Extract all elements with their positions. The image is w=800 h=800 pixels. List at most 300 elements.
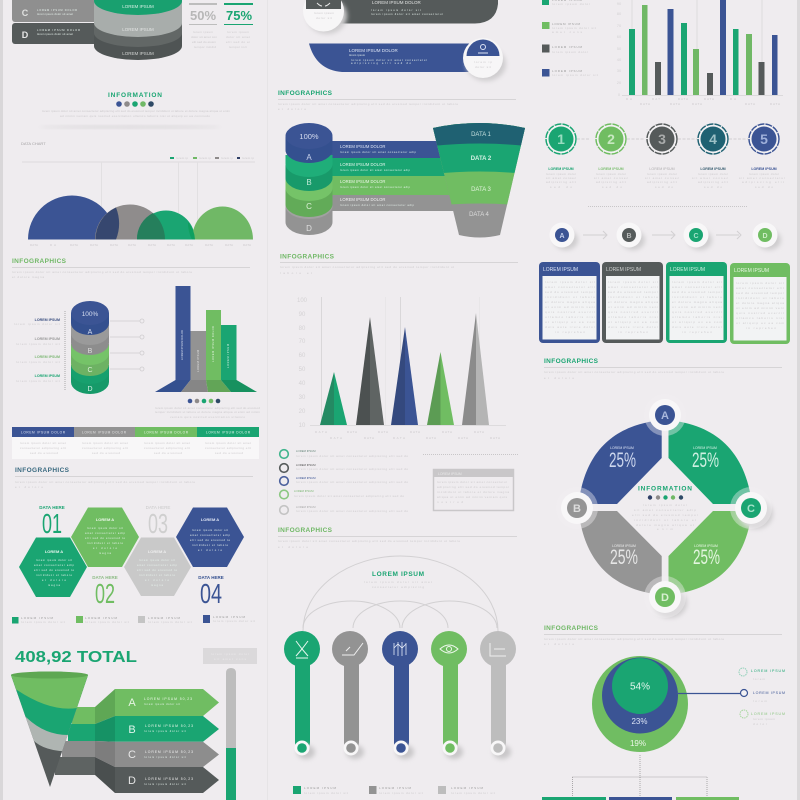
hexagon cluster: elit sed do eiusmod te [34,568,75,572]
arrow labels: lorem ipsum dolor sit [144,782,186,786]
pin 3 [382,631,418,759]
step 1: LOREM IPSUM [548,167,574,171]
card green: amet consectetur elit [672,285,722,289]
dots and caption [155,399,260,419]
x axis labels: DATA [458,436,468,440]
axis labels: DATA [30,243,38,247]
card dark: ullamco laboris nisi [608,315,658,319]
x axis labels: DATA [745,102,755,106]
description [280,265,454,275]
table: LOREM IPSUM DOLOR [21,430,66,434]
card blue: ullamco laboris nisi [545,315,595,319]
badge B: B [626,233,632,240]
hexagon legend: LOREM IPSUM [213,615,246,619]
hexagon cluster: LOREM A [45,549,63,554]
hexagon cluster: elit sed do eiusmod te [137,568,178,572]
description: lorem ipsum dolor sit amet consectetur adipiscing elit sed do eiusmod tempor incididunt ut labore [278,539,460,543]
x axis labels: DA [626,97,632,101]
hexagon cluster: incididunt ut labore [36,573,73,577]
ring legend: LOREM IPSUM [294,489,314,493]
card dark: amet consectetur elit [608,285,658,289]
step 1: adipiscing elit [546,180,576,184]
card blue: amet consectetur elit [545,285,595,289]
badge B [616,222,645,250]
panel: triangle chart [280,254,518,514]
x axis labels: DATA [315,430,327,434]
layered cylinder [94,0,182,60]
axis labels: DATA [128,243,136,247]
x axis labels: DATA [364,436,374,440]
x axis labels: DATA [442,430,452,434]
x axis labels: DATA [692,102,702,106]
pin legend: LOREM IPSUM [379,786,412,790]
cylinder stack: D [87,386,93,393]
funnel labels: DATA 4 [469,212,490,218]
nested circles: 54% [630,682,650,692]
step 2: LOREM IPSUM [598,167,624,171]
y axis labels: 80 [299,326,306,332]
data label 02 [92,575,118,609]
right labels: lorem [753,699,768,703]
card dark: quis nostrud exercit [608,310,658,314]
description: ad minim veniam quis nostrud exercitation ullamco laboris nisi ut aliquip ex ea commodo [60,114,210,118]
right labels: LOREM IPSUM [751,669,785,673]
funnel [11,672,88,787]
step 1 [546,124,576,189]
x axis labels: DATA [426,436,436,440]
step 3: lorem ipsum dolor [647,172,677,176]
bar chart with base: LOREM IPSUM [196,350,200,372]
hexagon legend: LOREM IPSUM [148,616,180,620]
hexagon cluster: LOREM A [201,517,219,522]
card light green: et dolore magna aliqua [736,301,784,305]
stat 75%: tempor inci [229,45,247,49]
left labels: LOREM IPSUM [35,337,60,341]
cylinder stack: 100% [299,132,319,141]
hexagon cluster: lorem ipsum dolor sit [139,558,175,562]
funnel labels: DATA 2 [471,156,492,162]
quadrant green: 25% [692,449,719,472]
quadrant green: LOREM IPSUM [693,446,717,450]
panel: infographics left 1 [12,258,260,459]
title: consectetur adipiscing [372,585,424,589]
hexagon cluster: amet consectetur adip [85,531,126,535]
stat 75%: elit sed do ei [226,40,250,44]
hexagon legend: LOREM IPSUM [85,616,118,620]
bar chart with base: LOREM IPSUM [226,344,230,368]
step 2: 2 [607,131,615,147]
arrow labels: B [128,724,136,736]
table: LOREM IPSUM DOLOR [144,430,189,434]
description [544,370,724,380]
centre information: elit sed do eiusmod tempor [632,513,698,517]
pin legend [293,786,495,795]
blue banner: adipiscing elit sed do [351,61,412,65]
arrow 1 [583,231,607,239]
x axis labels: DAT [652,97,660,101]
left labels: lorem ipsum dolor sit [14,322,60,326]
stat 50% [189,3,217,49]
arrow labels: lorem ipsum dolor sit [144,755,186,759]
stat 50%: lorem ipsum [193,30,214,34]
pin 2 [332,631,368,759]
x axis labels: DATA [670,102,680,106]
y axis labels: 50 [299,367,306,373]
card blue: LOREM IPSUM [543,267,578,273]
leader lines [110,319,144,371]
centre information: incididunt ut labore et [634,518,696,522]
card dark: ut aliquip ex ea com [608,320,658,324]
left labels: lorem ipsum dolor sit [16,379,60,383]
note box: aliqua ut enim ad minim veniam quis [437,495,508,499]
arrow labels [115,689,219,793]
card dark: duis aute irure dolor [608,325,658,329]
panel: cylinder to funnel [278,90,535,245]
grey label box [203,648,257,664]
step 5: LOREM IPSUM [751,167,777,171]
x axis labels: DATA [410,430,420,434]
note box: LOREM IPSUM [438,472,462,476]
step 2: adipiscing elit [596,180,626,184]
badge D [752,222,781,250]
table [12,427,259,459]
data label 04 [198,575,224,609]
card blue: in reprehen [555,330,585,334]
grey label box: sit amet cons [214,657,246,661]
blue badge: dolor sit [475,65,491,69]
data label 03: DATA HERE [146,505,170,510]
card green: ut aliquip ex ea com [672,320,722,324]
arrow labels: LOREM IPSUM 50,23 [145,724,193,728]
step 5: 5 [760,131,768,147]
panel: hexagons [12,467,255,624]
tab D: LOREM IPSUM DOLOR [37,28,80,32]
step 5 [739,124,785,189]
chart legend: lorem ip [199,156,211,160]
data label 01: 01 [42,508,62,539]
card green: LOREM IPSUM [670,267,705,273]
ring legend: lorem ipsum dolor sit amet consectetur adipiscing elit sed do [294,494,404,498]
title [364,571,432,589]
description: et dolore magna [12,275,44,279]
card light green: amet consectetur elit [736,286,784,290]
left labels: LOREM IPSUM [35,374,60,378]
x axis labels [315,430,500,440]
card light green: ullamco laboris nisi [736,316,784,320]
badge D [644,576,687,618]
blue banner: lorem ipsum [349,53,365,57]
ribbons: lorem ipsum dolor sit amet consectetur adip [340,185,411,189]
right labels: LOREM IPSUM [751,712,785,716]
description: lorem ipsum dolor sit amet consectetur adipiscing elit sed do eiusmod tempor incididunt ut labore [12,270,192,274]
bar legend: lorem ipsum dolor [552,50,588,54]
card green: ut enim ad minim veni [672,305,722,309]
x axis labels: DATA [330,436,342,440]
arrow labels: LOREM IPSUM 50,23 [145,777,193,781]
triangles [320,313,489,425]
bar legend: amet cons [552,30,582,34]
stat 75%: dolor sit amet [226,35,250,39]
dark banner [335,0,498,24]
badge A: A [661,410,669,422]
hexagon legend [12,615,255,624]
centre information: enim [657,527,674,531]
table: consectetur adipiscing elit [144,446,190,450]
heading: INFOGRAPHICS [544,625,599,632]
blue banner [309,44,470,72]
card green: lorem ipsum dolor sit [672,280,722,284]
heading: INFOGRAPHICS [280,254,335,260]
dark badge: lorem ipsum [314,11,334,15]
description: lorem ipsum dolor sit amet consectetur adipiscing elit sed do eiusmod tempor incididunt ut labore [15,480,195,484]
axis labels: DATA [185,243,193,247]
blue banner: lorem ipsum dolor sit amet consectetur [351,58,427,62]
axis labels: DATA [110,243,118,247]
funnel labels: DATA 1 [471,132,492,138]
step 1: 1 [557,131,565,147]
badge A [644,394,686,436]
card green: duis aute irure dolor [672,325,722,329]
y axis labels: 0 [618,92,621,97]
ring legend [280,449,408,514]
card blue: ut aliquip ex ea com [545,320,596,324]
x axis labels: DATA [770,102,780,106]
bar legend: LOREM IPSUM [552,22,580,26]
hexagon legend: lorem ipsum dolor sit [85,620,129,624]
tab C: C [22,8,29,18]
card light green: sed do eiusmod tempor [736,291,784,295]
axis labels: DATA [167,243,175,247]
description: et dolore [544,376,574,380]
step 4: lorem ipsum dolor [698,172,728,176]
x axis labels: DA [730,97,736,101]
dark banner: lorem ipsum dolor sit amet consectetur [371,12,443,16]
panel: bar chart top right [542,0,783,106]
y axis labels: 40 [617,57,622,62]
pin 5 [480,631,516,759]
ring legend: lorem ipsum dolor sit amet consectetur adipiscing elit sed do [296,467,408,471]
funnel labels [469,132,492,218]
hexagon cluster: lorem ipsum dolor sit [192,528,228,532]
card green: ullamco laboris nisi [672,315,722,319]
heading: INFOGRAPHICS [544,358,599,365]
hexagon cluster: amet consectetur adip [137,563,178,567]
quadrant grey [578,511,662,595]
ring legend: LOREM IPSUM [296,449,316,453]
hexagon cluster: amet consectetur adip [190,533,231,537]
panel: funnel total [5,648,257,800]
card blue: quis nostrud exercit [545,310,595,314]
description [42,109,230,118]
step 3: sed do [655,185,673,189]
axis labels: DATA [243,243,251,247]
card dark: sed do eiusmod tempor [608,290,658,294]
grey label box: lorem ipsum dolor [211,652,249,656]
hexagon cluster: et dolore [42,578,67,582]
cylinder stack [286,123,332,235]
step 3: sit amet consec [645,176,680,180]
vertical progress bar [226,668,236,800]
cylinder stack: C [87,367,93,374]
arrow 2 [652,231,675,239]
stat 75%: 75% [226,8,252,23]
connecting arcs [303,556,498,631]
card blue: duis aute irure dolor [545,325,595,329]
ring legend: lorem ipsum dolor sit amet consectetur adipiscing elit sed do [296,509,408,513]
arrow labels: lorem ipsum dolor sit [144,729,186,733]
axis labels: DATA [205,243,213,247]
bar legend [542,0,598,77]
quadrant grey: 25% [610,546,638,569]
stat 50%: tempor incidid [194,45,216,49]
note box [433,469,514,510]
description [544,637,724,646]
description: labore et [280,271,312,275]
chart legend: lorem ip [221,156,233,160]
card light green: LOREM IPSUM [734,268,769,274]
card light green: ut enim ad minim veni [736,306,784,310]
tab D: D [22,30,29,40]
bar legend: lorem ipsum dolor [552,2,590,6]
right labels [739,668,785,726]
funnel labels: DATA 3 [471,187,492,193]
pin 1 [284,631,320,759]
step 1: sit amet consec [546,176,576,180]
x axis labels: DATA [678,97,688,101]
step 4 [692,124,728,189]
card dark: in reprehen [618,330,648,334]
panel: numbered steps [546,124,785,206]
dark banner: LOREM IPSUM DOLOR [372,0,422,5]
y axis labels: 70 [617,23,622,28]
cylinder stack: A [88,329,93,336]
chart: semicircle data chart: DATA CHART [21,141,46,146]
description: lorem ipsum dolor sit amet consectetur adipiscing elit sed do eiusmod tempor incididunt ut labore [278,102,458,106]
right labels: LOREM IPSUM [753,691,785,695]
hexagon cluster: et dolore [198,548,223,552]
hexagon cluster: LOREM A [148,549,166,554]
cylinder stack [71,301,109,394]
hexagon legend: LOREM IPSUM [21,616,54,620]
card light green: ut aliquip ex ea com [736,321,784,325]
stat 75% [224,3,253,49]
y axis labels: 10 [299,423,306,429]
step 3 [645,124,680,189]
title: LOREM IPSUM [372,571,424,578]
blue badge: lorem ip [474,60,492,64]
dark badge: dolor sit [316,16,332,20]
pin 4 [431,631,467,759]
dark badge [303,0,347,34]
step 2: lorem ipsum dolor [596,172,626,176]
data label 04: 04 [200,578,222,609]
ring legend: lorem ipsum dolor sit amet consectetur adipiscing elit sed do [296,454,408,458]
panel: nested circles [542,625,785,800]
ribbons: LOREM IPSUM DOLOR [340,162,385,167]
step 3: LOREM IPSUM [649,167,675,171]
ribbons: LOREM IPSUM DOLOR [340,197,385,202]
x axis labels: DATA [704,97,714,101]
step 4: sed do [704,185,722,189]
cylinder stack: C [306,202,312,211]
y axis labels: 30 [299,395,306,401]
chart: semicircle data chart [21,141,255,247]
description: lorem ipsum dolor sit amet consectetur adipiscing elit sed do eiusmod tempor incididunt ut labore [544,370,724,374]
note box: adipiscing elit sed do eiusmod tempor [437,485,509,489]
tab C: LOREM IPSUM DOLOR [37,8,77,12]
table: LOREM IPSUM DOLOR [82,430,127,434]
heading: information: INFORMATION [108,92,162,99]
card dark: lorem ipsum dolor sit [608,280,658,284]
heading: INFOGRAPHICS [278,527,333,534]
blue badge [463,38,506,81]
step 3: adipiscing elit [647,180,677,184]
card dark [602,262,663,343]
y axis labels: 20 [299,409,306,415]
bar chart with base: LOREM IPSUM DOLOR [211,326,215,362]
card blue: ut enim ad minim veni [545,305,595,309]
stat 75%: lorem ipsum [227,30,250,34]
quadrant grey: LOREM IPSUM [612,544,636,548]
description: et dolore [278,545,308,549]
arrow labels: LOREM IPSUM 50,23 [145,750,193,754]
left labels [14,311,65,391]
axis labels: DATA [70,243,78,247]
y axis labels: 70 [299,339,306,345]
hexagon cluster: magna [99,552,112,555]
centre information: dolore magna aliqua ut [636,523,694,527]
card blue [539,262,600,343]
tab D [12,23,102,44]
badge D: D [661,592,669,604]
step 4: 4 [709,131,717,147]
card light green: incididunt ut labore [736,296,784,300]
arrow labels: LOREM IPSUM 50,23 [144,697,192,701]
leader line [678,690,748,696]
ring legend: LOREM IPSUM [296,463,316,467]
step 5: lorem ipsum dolor [749,172,779,176]
card blue: sed do eiusmod tempor [545,290,595,294]
dots and caption: lorem ipsum dolor sit amet consectetur adipiscing elit sed do eiusmod [155,406,260,410]
note box: incididunt ut labore et dolore magna [437,490,509,494]
step 1: sed do [550,185,572,189]
cylinder stack: A [306,153,312,162]
left labels: LOREM IPSUM [35,318,60,322]
quadrant blue [578,420,662,504]
x axis labels: DATA [474,430,484,434]
quadrant light green: 25% [693,546,720,569]
card green: in reprehen [682,330,712,334]
arrow labels: A [128,697,136,709]
y axis labels: 30 [617,68,622,73]
card light green: in reprehen [746,326,776,330]
x axis labels: DATA [640,102,650,106]
card light green: quis nostrud exercit [736,311,784,315]
chart legend: lorem ip [176,156,188,160]
hexagon cluster: incididunt ut labore [192,543,229,547]
left labels: lorem ipsum dolor sit [16,342,60,346]
dots and caption: tempor incididunt ut labore et dolore magna aliqua ut enim ad minim [155,410,260,414]
table: sed do eiusmod [30,451,58,455]
axis labels [30,243,251,247]
dots and caption: veniam quis nostrud exercitation ullamco [170,415,245,419]
ribbons [325,141,455,211]
step 2: sed do [602,185,622,189]
note box: nostrud [437,500,463,504]
y axis labels: 50 [617,46,622,51]
arrow 3 [716,231,741,239]
cylinder stack: 100% [82,311,99,318]
